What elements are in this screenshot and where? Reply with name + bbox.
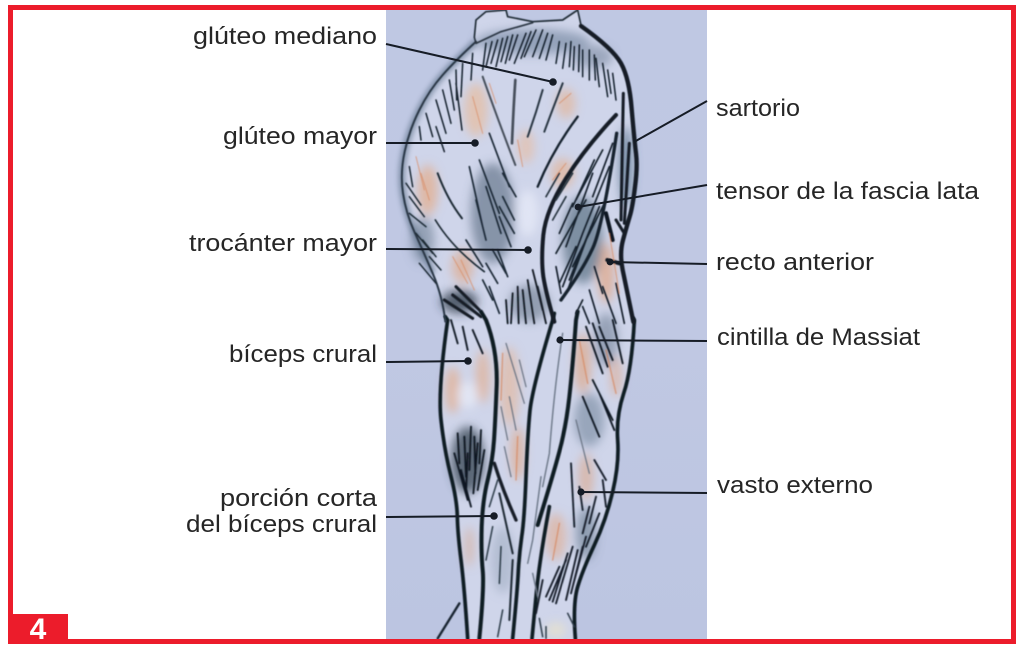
left labels	[186, 23, 377, 538]
leader: sartorio	[634, 101, 707, 142]
body silhouette	[402, 10, 637, 640]
label: porción corta del bíceps crural: porción corta	[220, 485, 377, 512]
right labels	[716, 95, 979, 499]
label: bíceps crural: bíceps crural	[229, 341, 377, 368]
label: glúteo mayor: glúteo mayor	[223, 123, 377, 150]
leader: vasto externo	[577, 488, 707, 496]
page number tab	[8, 613, 68, 646]
label: tensor de la fascia lata: tensor de la fascia lata	[716, 178, 979, 205]
leader: bíceps crural	[386, 357, 472, 365]
leader lines and dots	[386, 44, 707, 520]
outline	[402, 42, 476, 322]
leader: glúteo mayor	[386, 139, 479, 147]
soft shaded edge	[402, 42, 476, 273]
label: recto anterior: recto anterior	[716, 249, 874, 276]
label: glúteo mediano: glúteo mediano	[193, 23, 377, 50]
label: trocánter mayor: trocánter mayor	[189, 230, 377, 257]
label: porción corta del bíceps crural	[186, 485, 377, 538]
leader: cintilla de Massiat	[556, 336, 707, 344]
page number tab: 4	[30, 613, 47, 646]
leader: tensor de la fascia lata	[575, 185, 707, 210]
upper leg and gluteal drawing	[402, 10, 637, 323]
label: sartorio: sartorio	[716, 95, 800, 122]
lower leg drawing	[438, 312, 634, 638]
leader: recto anterior	[607, 259, 707, 265]
leader: glúteo mediano	[386, 44, 557, 86]
label: cintilla de Massiat: cintilla de Massiat	[717, 324, 920, 351]
leader: porción corta	[386, 512, 498, 520]
muscle fibre hatching	[419, 30, 616, 152]
label: vasto externo: vasto externo	[717, 472, 873, 499]
leader: trocánter mayor	[386, 246, 532, 254]
tendon lines	[528, 333, 563, 597]
illustration panel: leg muscles drawing	[386, 10, 707, 640]
label: porción corta del bíceps crural: del bíceps crural	[186, 511, 377, 538]
